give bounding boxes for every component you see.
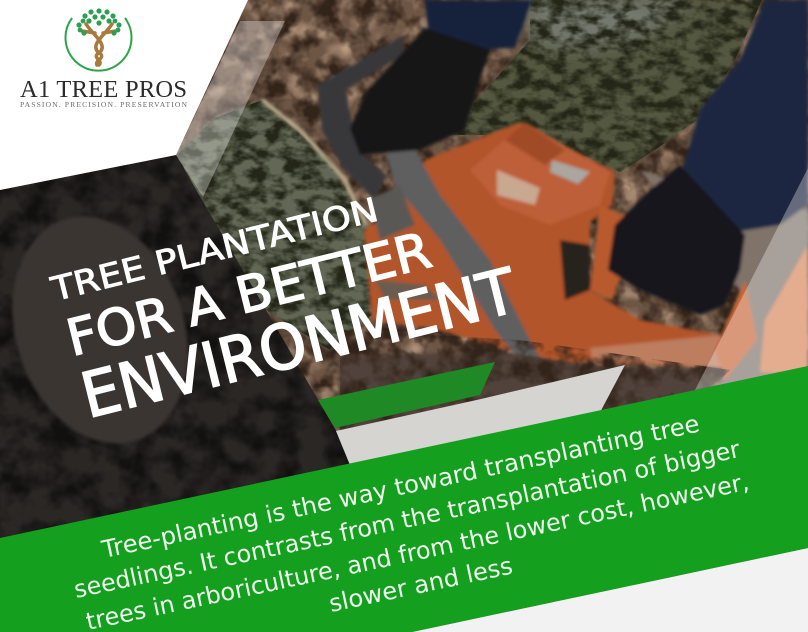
green text band [0, 366, 808, 632]
right ground [640, 170, 808, 388]
upper log [440, 0, 770, 180]
worker's orange trouser leg [760, 245, 808, 375]
logo [20, 8, 188, 109]
paragraph line 2: seedlings. It contrasts from the transplantation of bigger [71, 435, 743, 604]
title line 3: ENVIRONMENT [74, 254, 524, 433]
title line 2: FOR A BETTER [61, 221, 437, 368]
mossy log under overlay [190, 150, 385, 355]
logo name: A1 TREE PROS [20, 76, 187, 103]
translucent light sliver by the logo [176, 21, 285, 197]
logo tree foliage [76, 8, 122, 36]
white logo panel [0, 0, 248, 190]
logo tree trunk [82, 24, 116, 65]
paragraph line 1: Tree-planting is the way toward transplanting tree [98, 410, 702, 564]
logo ring [66, 18, 132, 71]
chainsaw body [364, 122, 722, 368]
dark overlay panel [0, 155, 350, 538]
log end in overlay [0, 194, 216, 466]
title line 1: TREE PLANTATION [46, 190, 382, 309]
left glove and sleeve [350, 0, 532, 155]
translucent right panel [695, 168, 808, 390]
chainsaw handle and bar [318, 36, 545, 366]
lower log [176, 100, 373, 351]
log cut edge [262, 100, 366, 225]
title [46, 190, 524, 433]
band paragraph [71, 410, 751, 632]
paragraph line 4: slower and less [326, 552, 515, 618]
white accent trapezoid [336, 365, 625, 470]
paragraph line 3: trees in arboriculture, and from the lower cost, however, [83, 468, 751, 632]
logo tagline: PASSION. PRECISION. PRESERVATION [20, 100, 188, 109]
light grey footer corner [412, 548, 808, 632]
right glove and sleeve [608, 0, 808, 315]
ground under the chainsaw [338, 330, 730, 430]
green accent trapezoid [318, 362, 495, 428]
